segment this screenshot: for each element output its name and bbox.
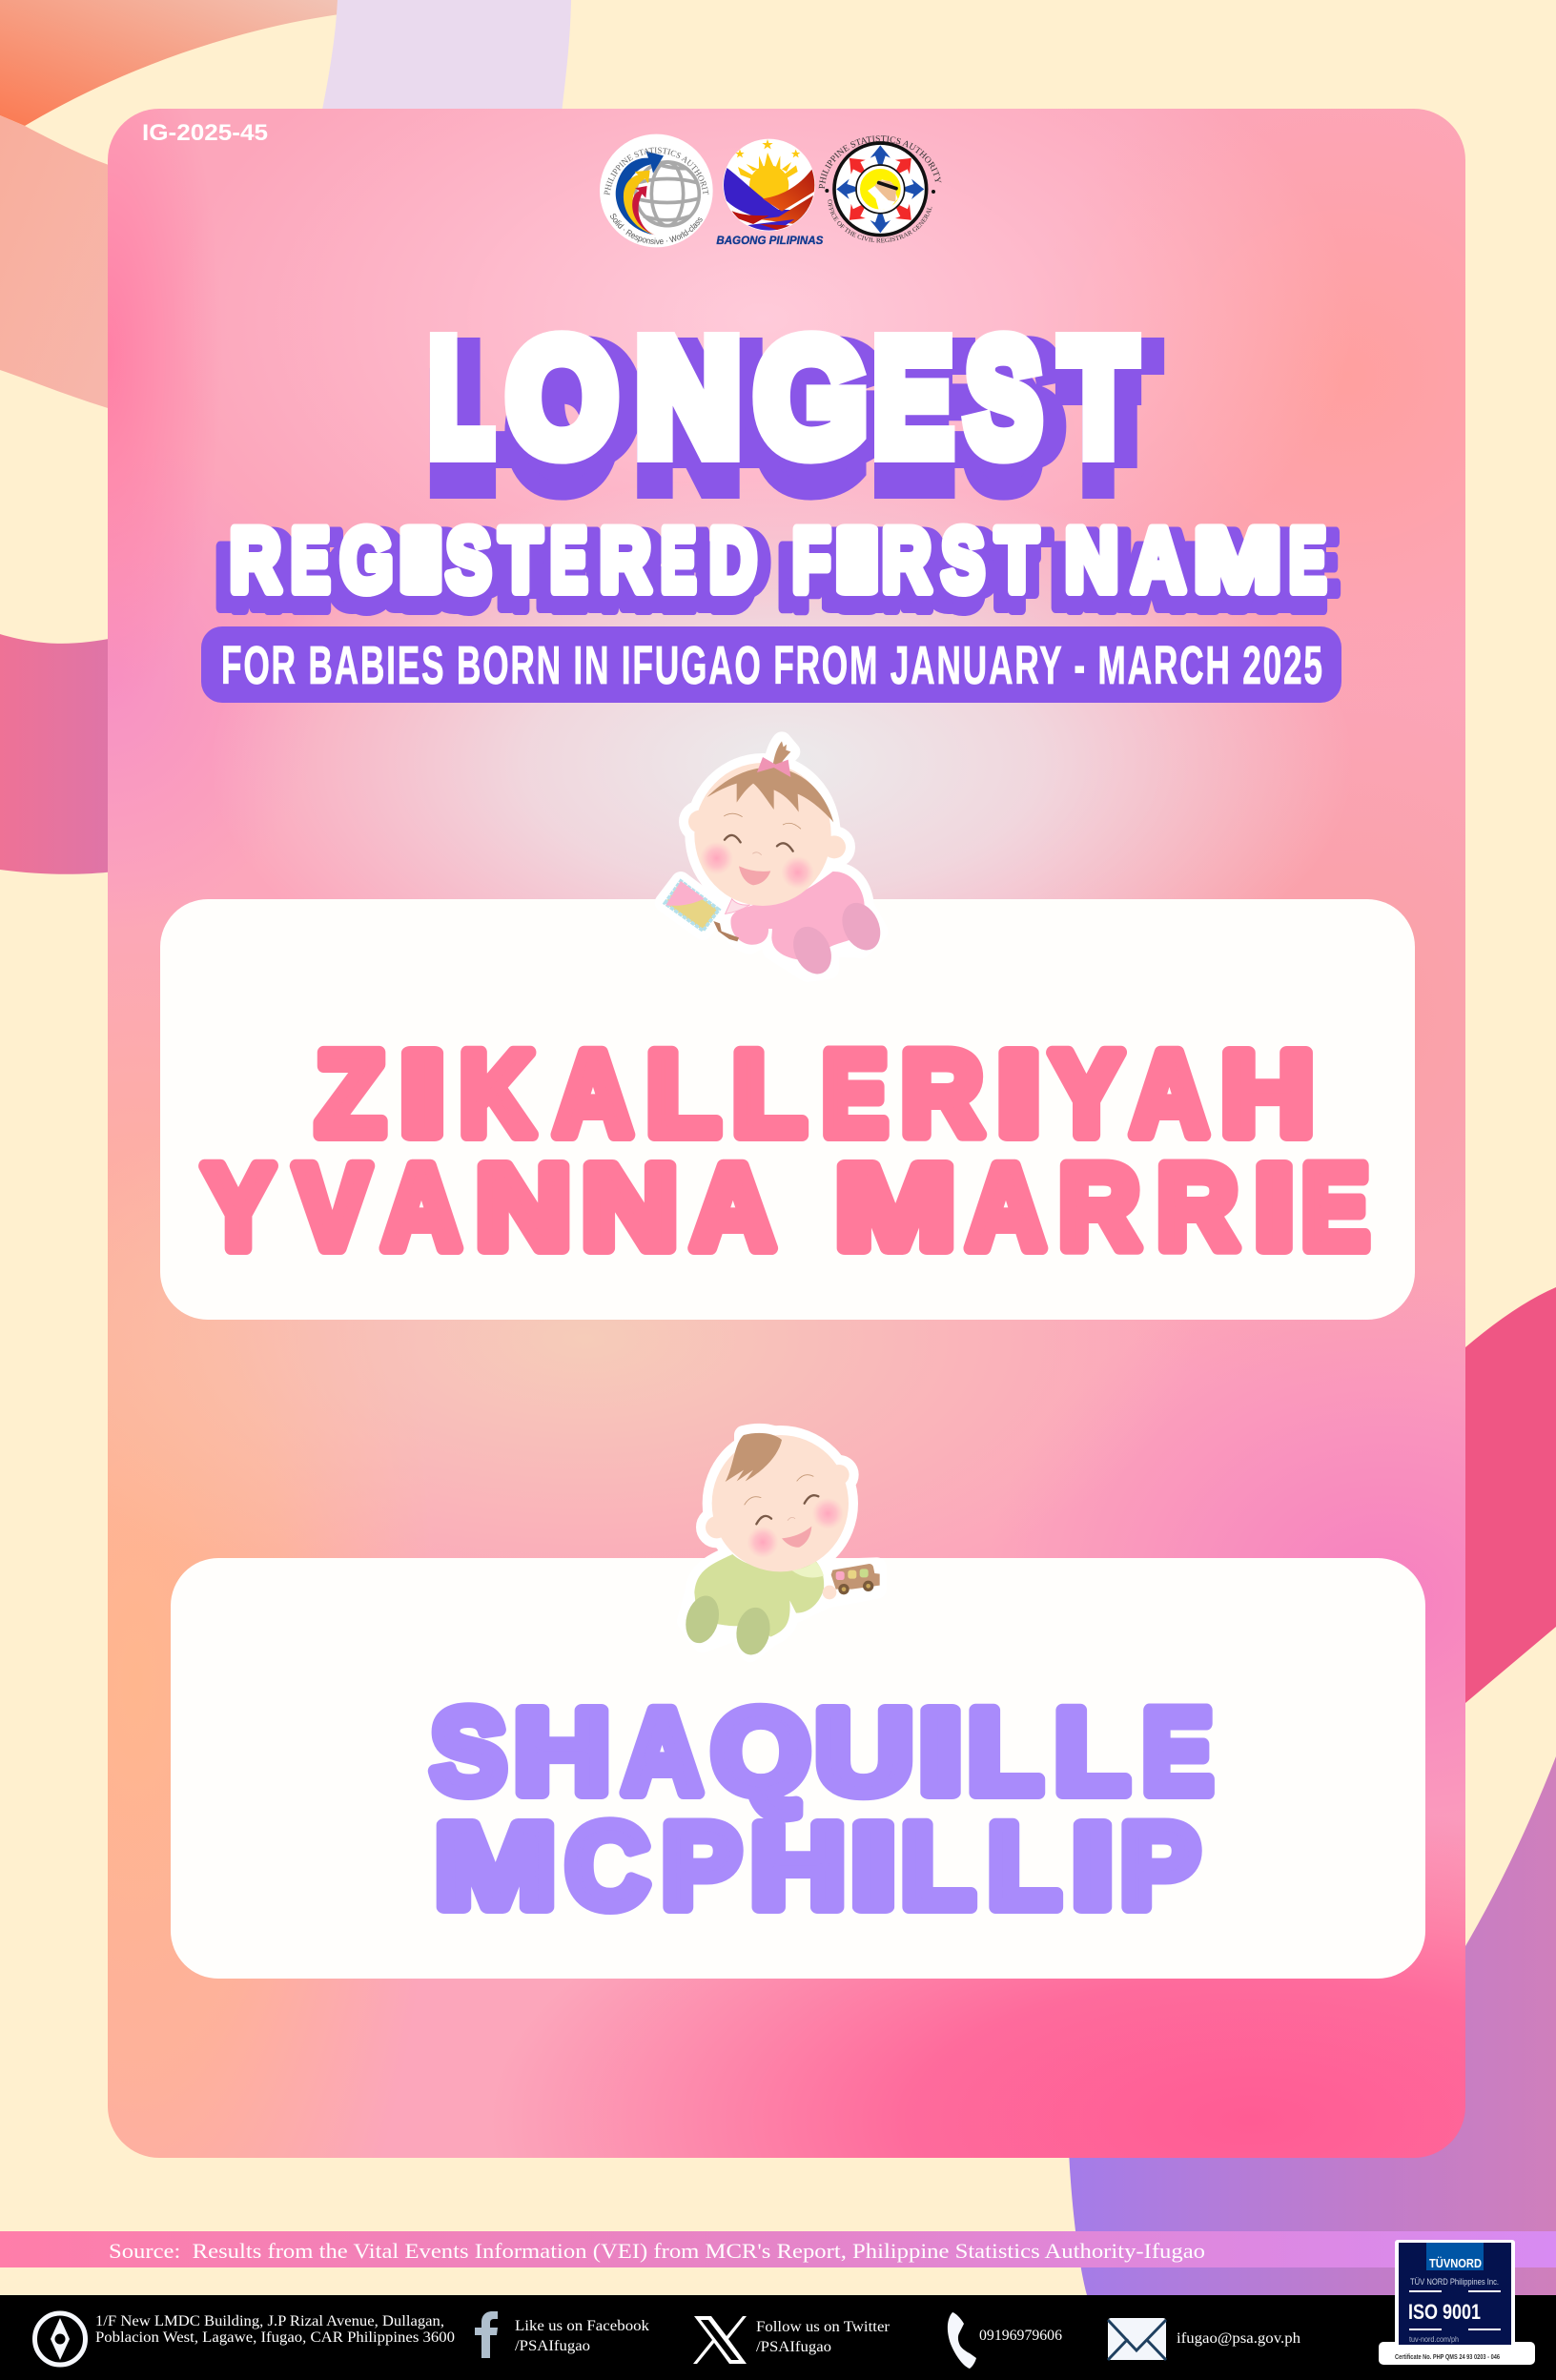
title: LONGEST: S [966,307,1041,488]
title: LONGEST [429,307,1158,524]
ISO certification badge: TÜV NORD Philippines Inc. [1410,2277,1499,2288]
name: girl: Y [1051,1028,1123,1160]
logos [600,133,942,248]
title: REGISTERED FIRST NAME: F [792,509,830,610]
title: REGISTERED FIRST NAME: E [536,526,573,627]
title: REGISTERED FIRST NAME: T [995,528,1037,629]
address [95,2313,455,2346]
title: REGISTERED FIRST NAME: E [1289,509,1326,610]
title: REGISTERED FIRST NAME: E [661,528,696,629]
title: REGISTERED FIRST NAME: F [806,513,844,612]
title: REGISTERED FIRST NAME: I [835,528,879,629]
name: boy: L [901,1800,974,1933]
facebook text: /PSAIfugao [515,2338,590,2354]
name: boy: I [1072,1800,1114,1933]
title: REGISTERED FIRST NAME: R [230,509,280,610]
title: REGISTERED FIRST NAME: A [1132,509,1185,610]
title: REGISTERED FIRST NAME: T [500,528,542,629]
ISO certification badge: TÜVNORD [1429,2256,1482,2270]
label: Bagong Pilipinas: BAGONG PILIPINAS [716,234,823,247]
card: second name [171,1558,1425,1979]
title: REGISTERED FIRST NAME: M [1194,509,1281,610]
name: boy: C [566,1800,648,1933]
title: REGISTERED FIRST NAME [215,509,1340,629]
name: girl: A [967,1141,1045,1274]
title: REGISTERED FIRST NAME: E [291,509,330,610]
title: REGISTERED FIRST NAME: E [674,513,709,612]
logo: Office of the Civil Registrar General: OFFICE OF THE CIVIL REGISTRAR GENERAL [828,199,932,242]
logo: Office of the Civil Registrar General: PHILIPPINE STATISTICS AUTHORITY [818,135,942,189]
name: girl: A [1131,1028,1208,1160]
name: boy: L [988,1800,1060,1933]
icon: phone [948,2312,976,2369]
title: REGISTERED FIRST NAME: M [1207,513,1295,612]
title: REGISTERED FIRST NAME: I [399,528,443,629]
title: LONGEST: G [778,313,890,494]
ISO certification badge [1379,2240,1535,2365]
icon: envelope [1108,2318,1166,2360]
name: boy: P [1120,1800,1199,1933]
title: LONGEST: E [873,307,952,488]
title: REGISTERED FIRST NAME: E [646,526,682,627]
title: REGISTERED FIRST NAME: I [412,513,457,612]
title: REGISTERED FIRST NAME: M [1194,528,1281,629]
name: boy: P [662,1800,741,1933]
title: LONGEST: L [452,313,516,494]
title: LONGEST: N [636,343,741,524]
ISO certification badge: tuv-nord.com/ph [1409,2334,1459,2344]
name: boy [431,1686,1213,1933]
source band [0,2231,1556,2267]
title: REGISTERED FIRST NAME: D [723,513,770,612]
title: REGISTERED FIRST NAME: G [340,528,393,629]
name: boy: I [850,1800,896,1933]
address: 1/F New LMDC Building, J.P Rizal Avenue, Dullagan, [95,2313,444,2329]
title: REGISTERED FIRST NAME: D [709,509,757,610]
title: REGISTERED FIRST NAME: E [1275,526,1312,627]
name: boy: U [815,1686,913,1818]
card: first name [160,899,1415,1320]
title: REGISTERED FIRST NAME: R [882,509,931,610]
title: LONGEST: T [1061,343,1136,524]
title: REGISTERED FIRST NAME: N [1078,513,1132,612]
title: REGISTERED FIRST NAME: A [1117,526,1171,627]
ISO certification badge: ISO 9001 [1408,2300,1481,2324]
name: boy: L [968,1686,1042,1818]
title: REGISTERED FIRST NAME: S [432,526,477,627]
title: LONGEST: L [429,307,493,488]
twitter text: /PSAIfugao [756,2339,831,2355]
name: boy: Q [711,1686,810,1818]
facebook text [515,2318,649,2354]
title: REGISTERED FIRST NAME: T [485,526,527,627]
title: REGISTERED FIRST NAME: E [550,509,587,610]
logo: Bagong Pilipinas [722,139,818,232]
title: REGISTERED FIRST NAME: S [942,528,984,629]
title: LONGEST: E [873,343,952,524]
name: boy: H [514,1686,610,1818]
title: REGISTERED FIRST NAME: F [792,528,830,629]
twitter text: Follow us on Twitter [756,2319,891,2335]
title: REGISTERED FIRST NAME: E [661,509,696,610]
title: REGISTERED FIRST NAME: G [326,526,379,627]
title: REGISTERED FIRST NAME: I [849,513,892,612]
footer bar [0,2295,1556,2380]
logo: PSA: PHILIPPINE STATISTICS AUTHORITY [604,147,709,195]
title: REGISTERED FIRST NAME: R [585,526,637,627]
title: LONGEST: S [966,343,1041,524]
title: REGISTERED FIRST NAME: E [550,528,587,629]
title: LONGEST: T [1084,313,1158,494]
title: REGISTERED FIRST NAME: A [1145,513,1198,612]
logo: Office of the Civil Registrar General [818,135,942,242]
name: girl: H [1220,1028,1314,1160]
name: girl: M [835,1141,955,1274]
name: girl [202,1028,1369,1274]
name: girl: L [646,1028,720,1160]
title: LONGEST: O [507,307,617,488]
name: girl: A [382,1141,461,1274]
title: REGISTERED FIRST NAME: I [820,526,866,627]
name: girl: N [582,1141,678,1274]
title: REGISTERED FIRST NAME: I [399,509,443,610]
title: REGISTERED FIRST NAME: D [709,528,757,629]
address: Poblacion West, Lagawe, Ifugao, CAR Philippines 3600 [95,2329,455,2346]
name: girl: R [1157,1141,1238,1274]
title: LONGEST: N [636,307,741,488]
title: REGISTERED FIRST NAME: R [868,526,917,627]
title: REGISTERED FIRST NAME: I [835,509,879,610]
title: REGISTERED FIRST NAME: E [304,513,343,612]
title: REGISTERED FIRST NAME: N [1051,526,1104,627]
ISO certification badge: Certificate No. PHP QMS 24 93 0203 - 046 [1395,2352,1500,2361]
title: LONGEST: E [896,313,975,494]
title: LONGEST: N [659,313,764,494]
icon: compass [34,2313,86,2365]
name: girl: N [476,1141,571,1274]
title: REGISTERED FIRST NAME: E [563,513,601,612]
title: REGISTERED FIRST NAME: S [955,513,997,612]
source band: Source: Results from the Vital Events Information (VEI) from MCR's Report, Philippine Statistics Authority-Ifugao [109,2239,1205,2263]
title: REGISTERED FIRST NAME: S [942,509,984,610]
subtitle pill: FOR BABIES BORN IN IFUGAO FROM JANUARY - MARCH 2025 [221,636,1322,696]
name: boy: I [919,1686,963,1818]
title: REGISTERED FIRST NAME: I [384,526,429,627]
icon: baby girl with rattle [665,741,888,980]
name: girl: A [691,1141,771,1274]
title: REGISTERED FIRST NAME: S [446,509,491,610]
icon: facebook [475,2311,498,2358]
title: REGISTERED FIRST NAME: R [613,513,664,612]
title: REGISTERED FIRST NAME: S [446,528,491,629]
title: REGISTERED FIRST NAME: E [291,528,330,629]
twitter text [756,2319,891,2355]
title: LONGEST: L [429,343,493,524]
name: boy: A [623,1686,702,1818]
title: REGISTERED FIRST NAME: R [215,526,267,627]
title: REGISTERED FIRST NAME: A [1132,528,1185,629]
title: REGISTERED FIRST NAME: E [1302,513,1340,612]
title: LONGEST: O [530,313,640,494]
title: REGISTERED FIRST NAME: D [695,526,742,627]
title: REGISTERED FIRST NAME: T [500,509,542,610]
title: REGISTERED FIRST NAME: R [230,528,280,629]
report code: IG-2025-45 [142,120,268,146]
title: REGISTERED FIRST NAME: E [276,526,316,627]
title: REGISTERED FIRST NAME: M [1180,526,1266,627]
title: REGISTERED FIRST NAME: G [340,509,393,610]
name: girl: R [901,1028,983,1160]
name: girl: A [554,1028,632,1160]
name: girl: E [822,1028,888,1160]
title: REGISTERED FIRST NAME: G [354,513,406,612]
name: girl: I [997,1028,1041,1160]
title: REGISTERED FIRST NAME: T [513,513,555,612]
name: boy: S [431,1686,506,1818]
title: REGISTERED FIRST NAME: N [1065,509,1118,610]
name: boy: H [750,1800,846,1933]
title: REGISTERED FIRST NAME: R [243,513,294,612]
icon: X [693,2316,747,2364]
title: REGISTERED FIRST NAME: R [600,528,650,629]
name: girl: K [460,1028,534,1160]
logo: PSA: Solid · Responsive · World-class [610,214,703,244]
title: REGISTERED FIRST NAME: T [1009,513,1051,612]
title: LONGEST: G [755,307,867,488]
main gradient panel [108,109,1465,2158]
name: boy: E [1142,1686,1213,1818]
title: REGISTERED FIRST NAME: R [882,528,931,629]
name: girl: L [732,1028,806,1160]
phone number: 09196979606 [979,2328,1062,2344]
title: REGISTERED FIRST NAME: S [460,513,504,612]
title: REGISTERED FIRST NAME: T [982,526,1024,627]
name: girl: R [1058,1141,1140,1274]
icon: baby boy with toy car [681,1433,880,1657]
facebook text: Like us on Facebook [515,2318,649,2334]
title: REGISTERED FIRST NAME: S [927,526,971,627]
title: REGISTERED FIRST NAME: N [1065,528,1118,629]
title: REGISTERED FIRST NAME: T [995,509,1037,610]
name: girl: Z [317,1028,385,1160]
name: girl: I [1255,1141,1295,1274]
name: boy: L [1054,1686,1129,1818]
title: LONGEST: T [1061,307,1136,488]
email: ifugao@psa.gov.ph [1177,2330,1300,2347]
name: girl: E [1301,1141,1369,1274]
name: girl: V [296,1141,370,1274]
logo: PSA [600,133,713,248]
name: girl: Y [202,1141,275,1274]
title: LONGEST: O [507,343,617,524]
title [215,307,1340,629]
title: REGISTERED FIRST NAME: R [895,513,944,612]
title: REGISTERED FIRST NAME: F [778,526,816,627]
title: REGISTERED FIRST NAME: R [600,509,650,610]
name: girl: I [399,1028,445,1160]
title: REGISTERED FIRST NAME: E [1289,528,1326,629]
toy car [831,1564,880,1594]
title: LONGEST: S [989,313,1064,494]
name: boy: M [435,1800,556,1933]
title: LONGEST: G [755,343,867,524]
